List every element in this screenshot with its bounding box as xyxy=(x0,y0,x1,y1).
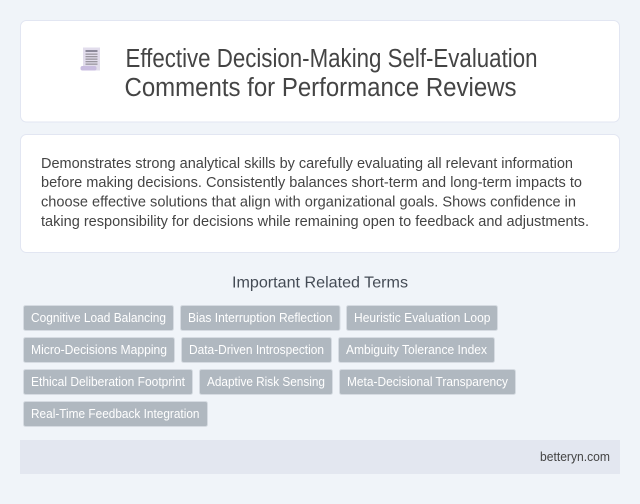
title: Effective Decision-Making Self-Evaluation xyxy=(126,45,538,73)
chip: Data-Driven Introspection xyxy=(182,338,332,362)
chip: Ambiguity Tolerance Index xyxy=(338,338,494,362)
chip: Data-Driven Introspection: Data-Driven Introspection xyxy=(189,342,324,357)
panel: description: taking responsibility for decisions while remaining open to feedback and adjustments. xyxy=(41,213,589,230)
panel: title card xyxy=(20,20,620,122)
chip: Adaptive Risk Sensing xyxy=(200,370,332,394)
panel: description: Demonstrates strong analytical skills by carefully evaluating all relevant information xyxy=(41,155,573,172)
chip: Cognitive Load Balancing xyxy=(24,306,174,330)
chip: Heuristic Evaluation Loop: Heuristic Evaluation Loop xyxy=(354,310,490,325)
chip: Real-Time Feedback Integration: Real-Time Feedback Integration xyxy=(31,406,200,421)
chip: Meta-Decisional Transparency xyxy=(340,370,516,394)
chip: Ethical Deliberation Footprint: Ethical Deliberation Footprint xyxy=(31,374,185,389)
title xyxy=(124,45,538,102)
chip: Ambiguity Tolerance Index: Ambiguity Tolerance Index xyxy=(346,342,487,357)
chip: Meta-Decisional Transparency: Meta-Decisional Transparency xyxy=(347,374,508,389)
chip: Real-Time Feedback Integration xyxy=(24,402,208,426)
footer bar xyxy=(20,440,620,474)
chip: Cognitive Load Balancing: Cognitive Load Balancing xyxy=(31,310,166,325)
icon: document scroll xyxy=(80,48,100,70)
chip: Micro-Decisions Mapping: Micro-Decisions Mapping xyxy=(31,342,167,357)
panel: description xyxy=(20,134,620,252)
chip: Heuristic Evaluation Loop xyxy=(346,306,498,330)
chip: Bias Interruption Reflection: Bias Interruption Reflection xyxy=(188,310,332,325)
term chips xyxy=(24,306,516,426)
chip: Adaptive Risk Sensing: Adaptive Risk Sensing xyxy=(207,374,325,389)
panel: description: choose effective solutions that align with organizational goals. Shows confidence in xyxy=(41,194,576,210)
chip: Micro-Decisions Mapping xyxy=(24,338,174,362)
panel: description: before making decisions. Consistently balances short-term and long-term impacts to xyxy=(41,174,582,191)
footer bar: betteryn.com xyxy=(540,450,610,464)
title: Comments for Performance Reviews xyxy=(124,74,516,102)
chip: Bias Interruption Reflection xyxy=(180,306,340,330)
chip: Ethical Deliberation Footprint xyxy=(24,370,192,394)
heading: related terms: Important Related Terms xyxy=(232,274,408,292)
